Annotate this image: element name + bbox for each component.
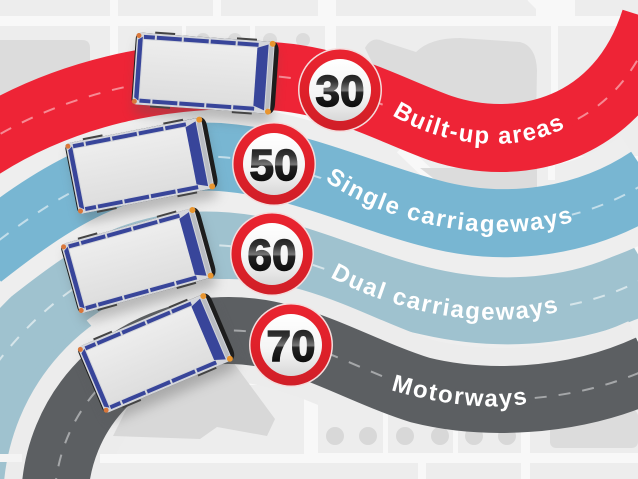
road: built-up areas: [0, 20, 638, 146]
speed sign: 30: 30: [316, 67, 364, 116]
road labels: [320, 102, 572, 412]
label: built-up areas: Built-up areas: [393, 102, 564, 148]
speed sign: 50: [232, 122, 316, 206]
van: motorways: [76, 290, 241, 423]
label: motorways: Motorways: [392, 374, 526, 412]
road: dual carriageways: [0, 245, 638, 479]
speed sign: 70: 70: [267, 322, 315, 371]
road: motorways: [0, 330, 638, 479]
van: built-up areas: [130, 30, 279, 124]
speed sign: 60: [230, 212, 314, 296]
label: dual carriageways: Dual carriageways: [331, 263, 557, 324]
van: dual carriageways: [59, 204, 220, 324]
speed sign: 70: [249, 303, 333, 387]
label: single carriageways: Single carriageways: [327, 169, 572, 237]
speed sign: 50: 50: [250, 141, 298, 190]
van: single carriageways: [64, 114, 221, 224]
road: single carriageways: [0, 148, 638, 255]
speed sign: 30: [298, 48, 382, 132]
speed sign: 60: 60: [248, 231, 296, 280]
